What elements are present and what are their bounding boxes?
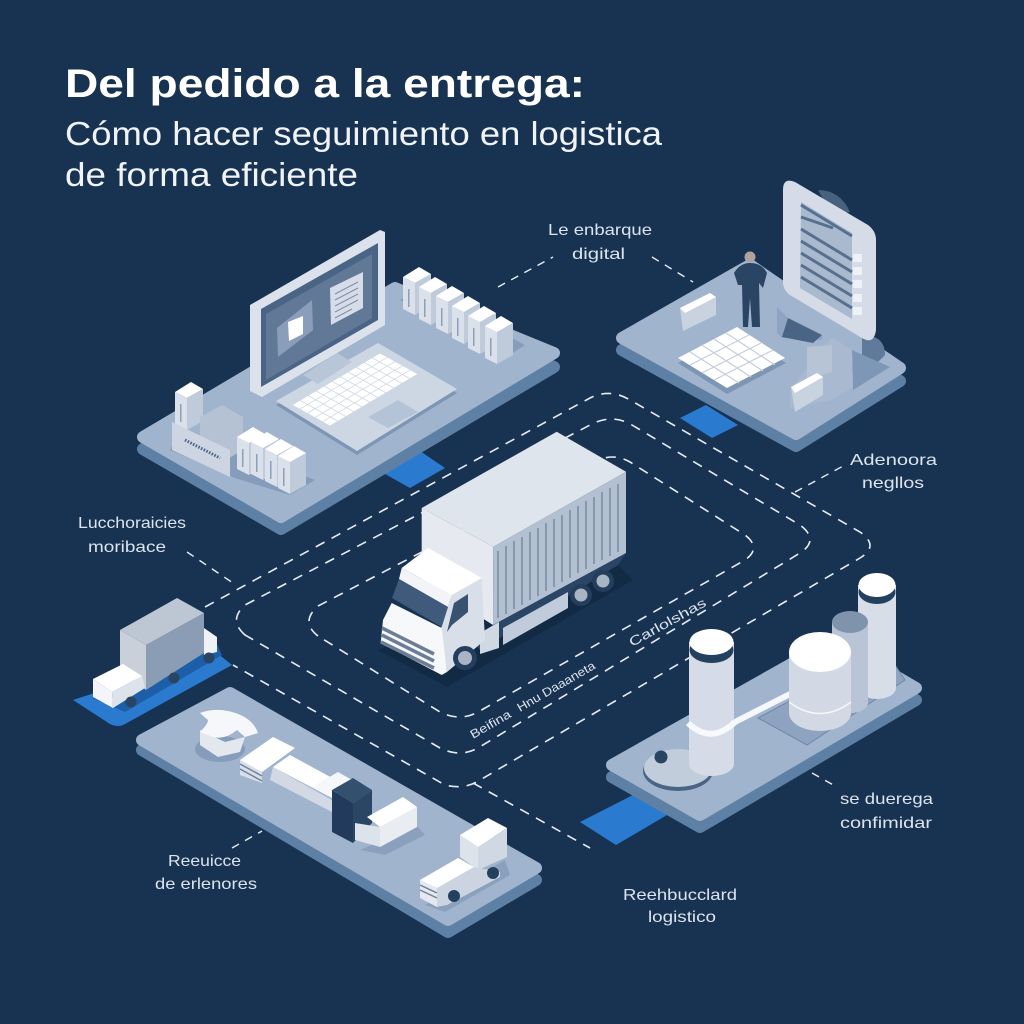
label: monitoring: [78, 515, 186, 556]
icon: medium cylinder: [832, 611, 868, 713]
icon: small truck: [420, 818, 510, 912]
truck wheels: [570, 570, 614, 606]
label: logistics: [623, 887, 737, 926]
dashed route network: [205, 393, 870, 848]
panel: processing platform: [142, 693, 536, 932]
icon: document stand: [777, 307, 890, 408]
label: monitoring: moribace: [88, 539, 166, 556]
icon: curved white part: [195, 710, 258, 762]
leader lines: [187, 257, 845, 848]
icon: disk: [643, 749, 713, 791]
truck box: [422, 432, 626, 625]
subtitle: de forma eficiente: [65, 156, 358, 193]
label: digital boarding: digital: [572, 246, 625, 263]
truck fuel tanks: [480, 622, 499, 654]
subtitle: [65, 115, 663, 193]
icon: pipe: [733, 693, 792, 723]
route labels: Carlolshas: [626, 594, 709, 650]
icon: front cylinder: [688, 629, 735, 776]
label: delivery confirmed: [840, 791, 933, 832]
icon: server row back: [400, 267, 525, 364]
icon: server cluster front: [170, 382, 315, 495]
blue connector: storage platform: [580, 795, 667, 845]
truck chassis: [470, 553, 626, 650]
icon: monitor: [250, 230, 385, 397]
truck cab: [381, 548, 485, 675]
icon: white block: [355, 797, 425, 855]
icon: laptop keyboard base: [276, 343, 457, 455]
label: monitoring: Lucchoraicies: [78, 515, 186, 532]
title: [65, 62, 663, 193]
label: digital boarding: Le enbarque: [548, 222, 652, 239]
base plate: [758, 650, 905, 745]
label: advisory: Adenoora: [850, 452, 937, 469]
icon: back gear: [818, 190, 885, 365]
label: reduce errors: de erlenores: [155, 876, 257, 893]
panel: document platform: [622, 181, 900, 446]
icon: keypad grid: [678, 327, 786, 394]
blue connector: document platform: [680, 405, 738, 438]
route labels: Hnu Daaaneta: [514, 658, 598, 715]
label: reduce errors: Reeuicce: [168, 853, 241, 870]
blue connector: laptop platform: [378, 449, 445, 488]
icon: dark cube: [332, 778, 372, 843]
route labels: Beifina: [468, 707, 514, 742]
icon: large drum: [789, 632, 851, 731]
subtitle: Cómo hacer seguimiento en logistica: [65, 115, 663, 152]
title: Del pedido a la entrega:: [65, 62, 585, 106]
icon: document tablet: [783, 181, 876, 340]
icon: stacked blocks: [240, 737, 352, 812]
label: delivery confirmed: confimidar: [840, 815, 933, 832]
label: digital boarding: [548, 222, 652, 263]
truck shadow: [378, 560, 633, 687]
icon: tall cylinder: [858, 573, 896, 699]
icon: small van on blue base: [73, 598, 232, 726]
route labels: [468, 594, 709, 742]
label: advisory: negllos: [862, 475, 924, 492]
panel: storage platform: [612, 573, 916, 827]
label: delivery confirmed: se duerega: [840, 791, 933, 808]
label: logistics: Reehbucclard: [623, 887, 737, 904]
label: logistics: logistico: [648, 909, 716, 926]
icon: person: [734, 252, 767, 327]
icon: central truck: [381, 432, 626, 675]
panel: laptop platform: [143, 230, 554, 529]
label: advisory: [850, 452, 937, 492]
label: reduce errors: [155, 853, 257, 893]
icon: small server left: [680, 293, 716, 331]
icon: small server right: [791, 373, 823, 412]
